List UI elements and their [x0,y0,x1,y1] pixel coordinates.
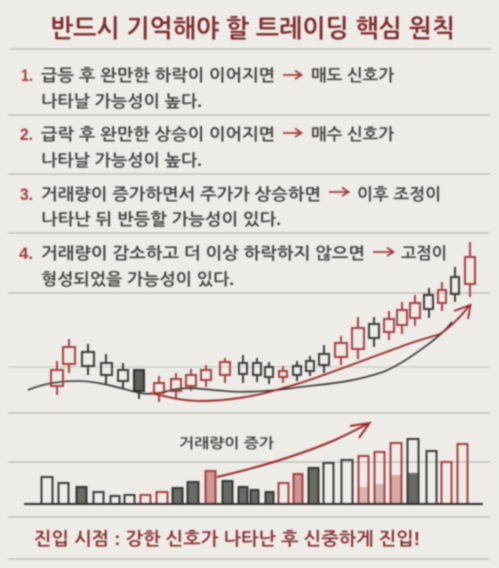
rule 3: 나타난 뒤 반등할 가능성이 있다. [41,211,281,229]
rule 3 [20,185,441,229]
arrow: rule 2 [283,128,302,137]
red trend arrow [150,305,470,401]
red outlined bars [140,444,468,504]
rule 2: 매수 신호가 [311,126,394,144]
rule 4 [19,244,447,289]
rule 2: 2. [20,126,33,144]
volume label: 거래량이 증가 [179,435,275,451]
arrow: rule 3 [329,188,348,196]
rule 4: 4. [19,245,33,263]
rule 3: 이후 조정이 [357,186,441,204]
volume arrow [217,423,370,477]
black trend curve [28,322,452,394]
rule 3: 3. [20,186,33,204]
arrow: rule 4 [373,248,394,256]
black candles [82,267,459,399]
candlestick chart [28,242,475,402]
rule 4: 고점이 [401,245,447,263]
rule 2: 급락 후 완만한 상승이 이어지면 [41,125,275,144]
rule 1: 급등 후 완만한 하락이 이어지면 [41,67,275,85]
rule 2 [20,125,394,170]
arrow: rule 1 [283,70,302,79]
red filled bars [206,471,302,504]
partially filled bars [358,439,419,504]
rule 3: 거래량이 증가하면서 주가가 상승하면 [41,185,321,204]
title: 반드시 기억해야 할 트레이딩 핵심 원칙 [50,15,455,43]
rule 1: 매도 신호가 [311,67,394,85]
red candles [51,242,475,402]
rule 1: 나타날 가능성이 높다. [41,93,202,111]
rule 2: 나타날 가능성이 높다. [41,152,202,170]
entry timing note: 진입 시점 : 강한 신호가 나타난 후 신중하게 진입! [34,529,420,549]
volume bar chart [24,439,483,504]
rule 1: 1. [21,67,33,85]
rule 4: 형성되었을 가능성이 있다. [41,270,234,289]
rule 4: 거래량이 감소하고 더 이상 하락하지 않으면 [41,244,365,263]
black outlined bars [42,451,436,504]
filled grey bars [76,468,318,504]
rule 1 [21,67,394,111]
